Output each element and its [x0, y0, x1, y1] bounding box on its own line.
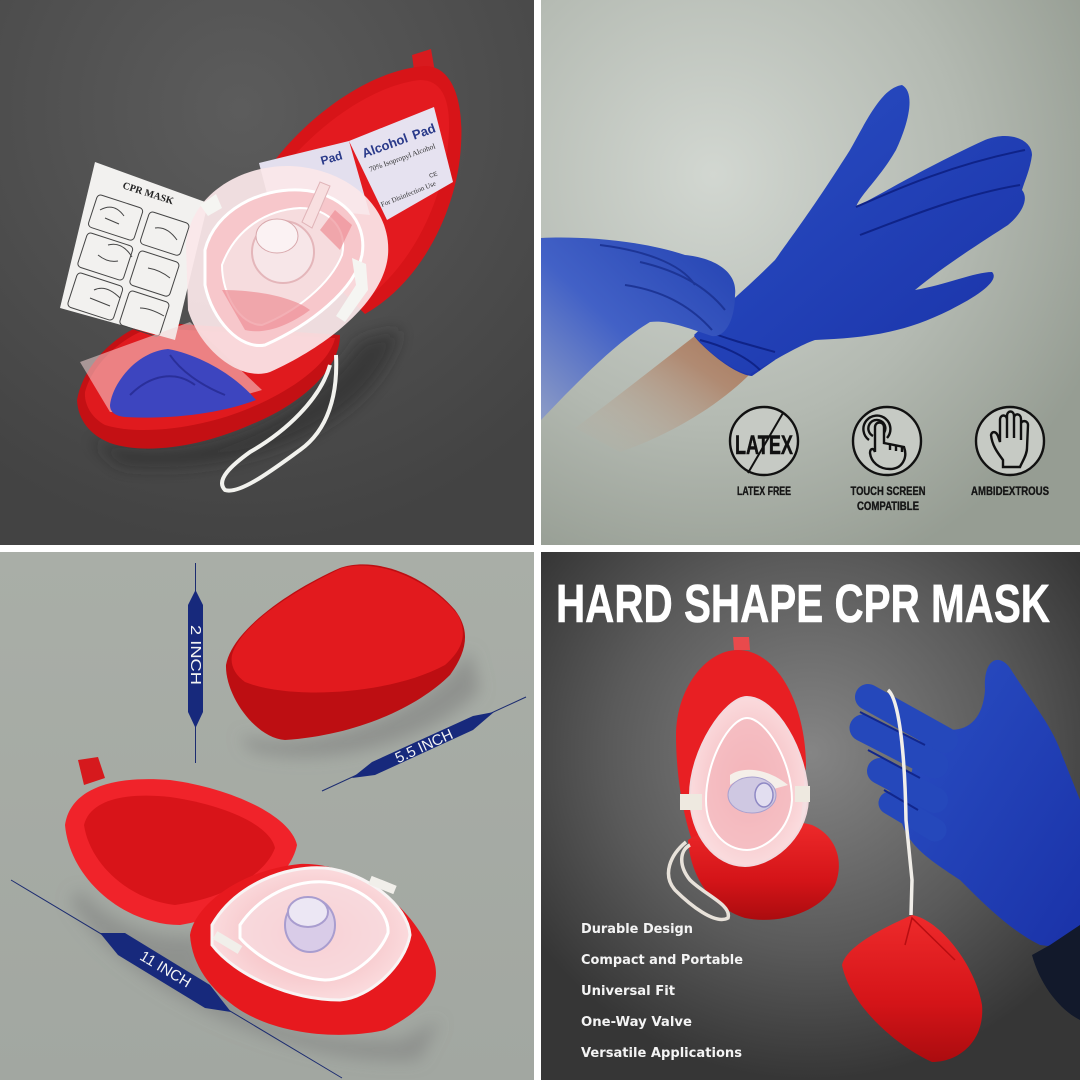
feature list: Universal Fit: [581, 984, 675, 999]
dimension: 2 inch: [187, 563, 204, 763]
feature list: Versatile Applications: [581, 1046, 742, 1061]
alcohol pad: For Disinfection Use: [380, 179, 437, 209]
dimension: 11 inch: [11, 880, 342, 1078]
feature list: One-Way Valve: [581, 1015, 692, 1030]
alcohol pad: [259, 107, 453, 220]
alcohol pad: CE: [429, 171, 439, 180]
sleeve: [1032, 925, 1080, 1020]
closed red case hanging: [842, 915, 982, 1062]
closed case: [226, 564, 465, 740]
case base: [77, 322, 340, 449]
icon labels: LATEX FREE: [737, 484, 791, 498]
dimension: 5.5 inch: [322, 697, 526, 791]
icon labels: AMBIDEXTROUS: [971, 484, 1049, 498]
panel: kit contents (top left): [0, 0, 534, 545]
gloved hand: left: [541, 238, 735, 420]
panel: nitrile glove (top right): [541, 0, 1080, 545]
dimension: 11 inch: 11 INCH: [137, 948, 194, 991]
feature list: Durable Design: [581, 922, 693, 937]
lanyard: [888, 690, 912, 915]
strap loop: [222, 355, 336, 491]
gloved hand: pulling: [694, 335, 775, 376]
icon: touch screen: [853, 407, 921, 475]
bagged gloves: [80, 322, 262, 418]
blue glove: [860, 660, 1080, 950]
dimension: 5.5 inch: 5.5 INCH: [393, 726, 456, 767]
strap loop: [669, 842, 728, 919]
panel: dimensions (bottom left): [0, 552, 534, 1080]
icon: latex free: LATEX: [735, 430, 793, 460]
icon labels: [737, 484, 1049, 513]
clear mask: [186, 166, 388, 374]
open case bottom: [65, 757, 436, 1035]
icon: ambidextrous: [976, 407, 1044, 475]
arm: [575, 332, 752, 452]
icon labels: COMPATIBLE: [857, 499, 919, 513]
instruction card: [60, 162, 208, 340]
open case lid: [275, 49, 461, 314]
icon labels: TOUCH SCREEN: [850, 484, 926, 498]
alcohol pad: 70% Isopropyl Alcohol: [368, 141, 436, 174]
icon: latex free: [730, 407, 798, 475]
alcohol pad: Alcohol Pad: [360, 120, 438, 161]
instruction card: CPR MASK: [121, 180, 175, 207]
feature list: [581, 922, 743, 1061]
panel: hard shape CPR mask (bottom right): [541, 552, 1080, 1080]
open red case with mask: [676, 637, 839, 920]
dimension: 2 inch: 2 INCH: [187, 625, 204, 685]
alcohol pad: Pad: [319, 148, 344, 168]
feature list: Compact and Portable: [581, 953, 743, 968]
